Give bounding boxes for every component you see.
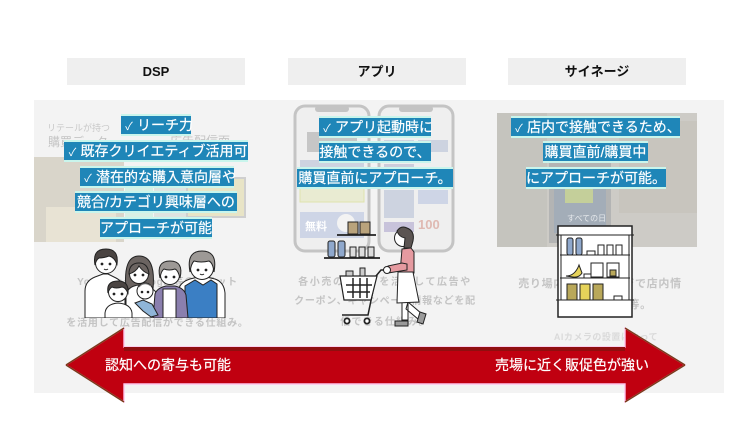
faded DSP diagram <box>34 122 246 242</box>
callouts: DSP: ✓ <box>125 121 133 133</box>
grandpa <box>178 251 225 318</box>
callouts: DSP <box>64 114 248 239</box>
callouts: アプリ <box>297 116 453 189</box>
arrow label: left: 認知への寄与も可能 <box>105 357 231 373</box>
callouts: サイネージ: 店内で接触できるため、 <box>527 119 681 135</box>
faded body text: DSP <box>66 277 249 329</box>
faded body text: アプリ <box>294 276 476 328</box>
callouts: サイネージ <box>511 116 681 189</box>
faded phone: left <box>294 104 370 252</box>
boy <box>105 281 132 318</box>
faded DSP diagram: 購買データ <box>48 134 108 149</box>
faded body text: DSP: YouTubeやGoogle等のプラット <box>77 277 238 288</box>
faded body text: サイネージ: 売り場内のサイネージで店内情 <box>518 278 682 290</box>
callouts: サイネージ: ✓ <box>515 123 523 135</box>
faded phone: left: 無料 <box>305 219 327 233</box>
father <box>85 249 125 318</box>
faded body text: アプリ: 各小売のアプリを活用して広告や <box>298 277 472 288</box>
shopper top <box>400 248 414 273</box>
faded body text: DSP: を活用して広告配信ができる仕組み。 <box>66 318 249 329</box>
callouts: DSP: リーチ力 <box>137 117 193 133</box>
faded body text: サイネージ <box>518 278 682 342</box>
faded body text: サイネージ: 報を配信する等。 <box>558 299 652 311</box>
heading: アプリ <box>288 58 466 85</box>
heading: サイネージ: サイネージ <box>565 64 629 79</box>
faded signage photo: すべての日 <box>567 214 606 223</box>
faded body text: DSP: フォームにリテールデータ <box>93 297 222 308</box>
faded signage photo <box>497 113 697 247</box>
cart <box>342 270 386 315</box>
arrow label: right: 売場に近く販促色が強い <box>495 357 649 373</box>
double-headed arrow <box>65 327 686 404</box>
faded body text: サイネージ: AIカメラの設置によって <box>554 332 658 342</box>
mother <box>126 256 161 318</box>
callouts: サイネージ: にアプローチが可能。 <box>526 170 666 186</box>
callouts: DSP: アプローチが可能 <box>100 220 212 236</box>
callouts: アプリ: ✓ <box>323 123 331 135</box>
faded body text: アプリ: 信できる仕組み。 <box>340 317 430 328</box>
faded DSP diagram: 広告配信面 <box>170 134 230 148</box>
faded body text: アプリ: クーポン、キャンペーン情報などを配 <box>294 296 476 307</box>
callouts: DSP: ✓ <box>69 147 76 159</box>
illustration: store display case <box>556 225 634 318</box>
heading: DSP: DSP <box>143 64 169 79</box>
faded phone: right: 100 <box>418 217 440 232</box>
heading: サイネージ <box>508 58 686 85</box>
callouts: アプリ: 購買直前にアプローチ。 <box>298 170 452 186</box>
illustration: family <box>84 248 226 318</box>
callouts: サイネージ: 購買直前/購買中 <box>545 144 646 160</box>
shopper legs <box>402 302 422 320</box>
callouts: DSP: ✓ <box>84 173 92 185</box>
callouts: DSP: 潜在的な購入意向層や <box>96 169 236 185</box>
callouts: DSP: 既存クリイエティブ活用可 <box>80 143 248 159</box>
callouts: DSP: 競合/カテゴリ興味層への <box>77 194 235 210</box>
heading: DSP <box>67 58 245 85</box>
grandmother <box>153 261 188 318</box>
heading: アプリ: アプリ <box>357 64 396 79</box>
baby <box>135 283 158 317</box>
apron <box>397 272 419 303</box>
callouts: アプリ: 接触できるので、 <box>319 144 431 160</box>
illustration: shelf and shopper <box>324 222 427 326</box>
faded DSP diagram: リテールが持つ <box>47 122 110 133</box>
callouts: アプリ: アプリ起動時に <box>335 119 433 135</box>
background panel <box>34 100 724 393</box>
faded phone: right <box>378 104 454 252</box>
